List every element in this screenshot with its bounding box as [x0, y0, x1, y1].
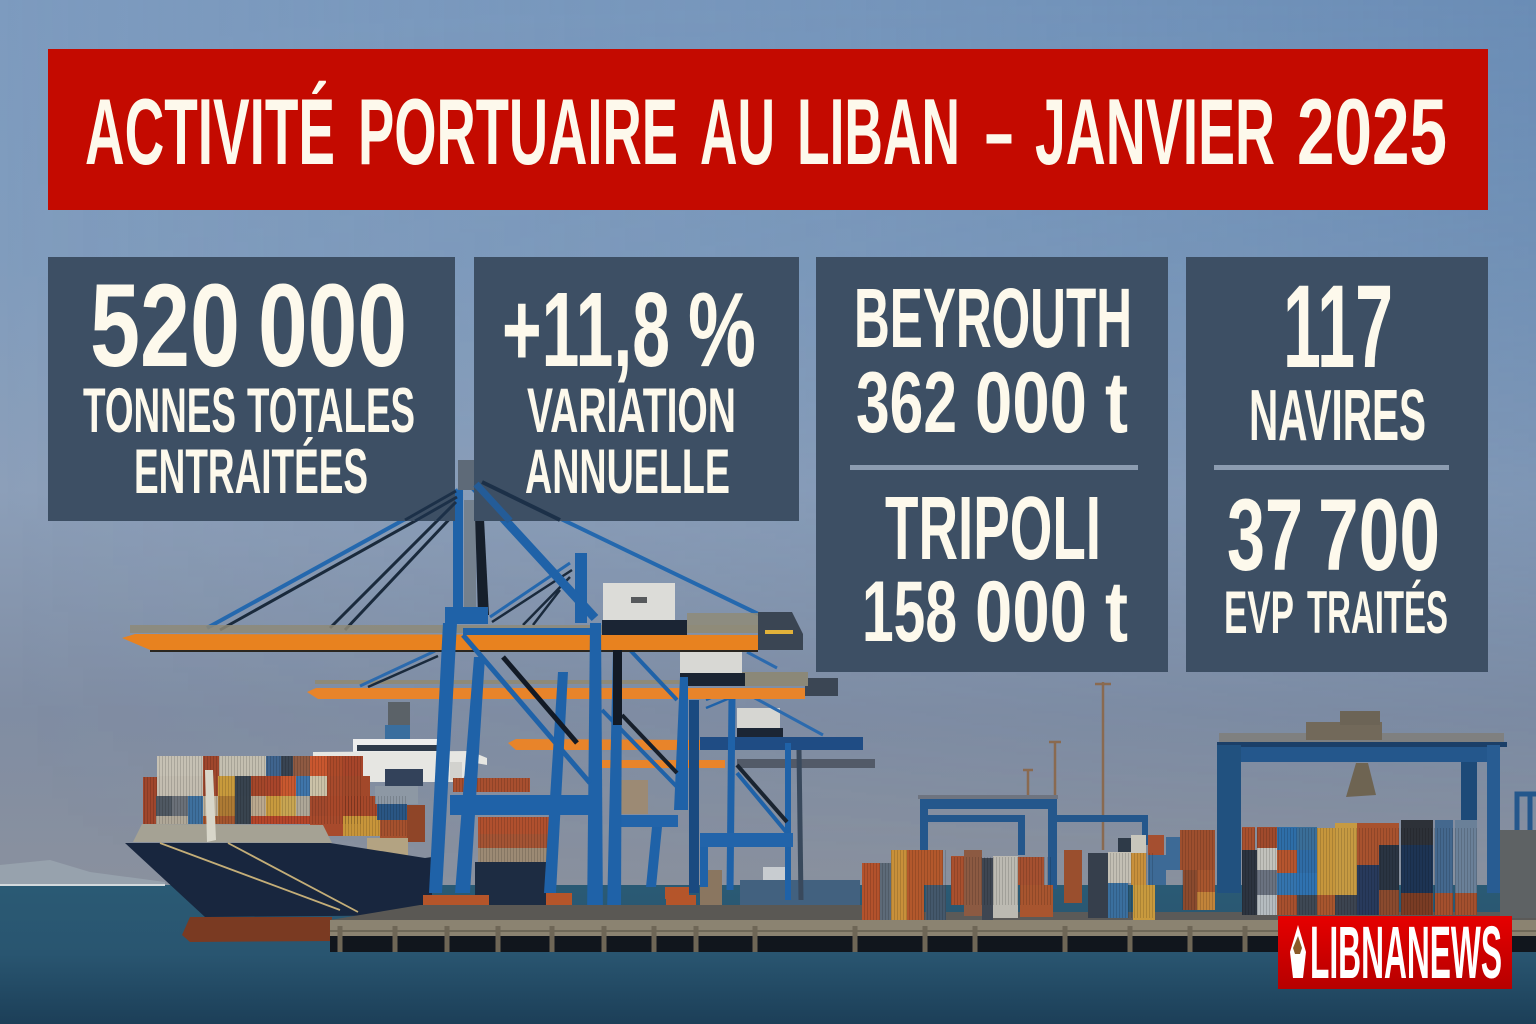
- annual variation number: %: [688, 271, 756, 389]
- total tonnage label: TONNES: [83, 376, 236, 446]
- panel: total tonnage: [48, 257, 455, 521]
- total tonnage label: [83, 376, 415, 507]
- crane cabin: [602, 583, 687, 635]
- Beyrouth figure: 000: [975, 355, 1087, 451]
- third crane: [508, 690, 863, 900]
- logo: Libnanews: [1278, 911, 1512, 994]
- crane bogies: [423, 893, 569, 915]
- Tripoli figure: [862, 479, 1128, 660]
- title text: –: [985, 79, 1013, 184]
- title text: ACTIVITÉ: [85, 79, 335, 184]
- ship hull: [125, 843, 552, 917]
- crane boom: [122, 612, 803, 652]
- icon: pen nib: [1290, 925, 1306, 978]
- mooring ropes: [160, 843, 358, 912]
- ship red keel: [182, 917, 332, 942]
- TEU figure: 700: [1318, 478, 1440, 592]
- quay deck: [330, 905, 870, 920]
- ship superstructure: [313, 702, 487, 782]
- Beyrouth figure: 362: [856, 355, 957, 451]
- annual variation label: ANNUELLE: [525, 437, 730, 507]
- panel: ships and TEU: [1186, 257, 1488, 672]
- ship containers: [143, 756, 550, 863]
- ships figure: 117: [1283, 261, 1393, 393]
- second crane: [307, 553, 838, 893]
- quay: [330, 905, 1536, 952]
- title text: 2025: [1297, 79, 1447, 184]
- ship deck: [133, 824, 332, 843]
- yard lamp posts: [1023, 682, 1111, 850]
- Beyrouth figure: t: [1105, 355, 1128, 451]
- TEU figure: [1224, 478, 1448, 646]
- panel: annual variation: [474, 257, 799, 521]
- total tonnage label: ENTRAITÉES: [134, 437, 368, 507]
- container ship: [125, 702, 552, 942]
- rear quay cranes: [307, 553, 875, 909]
- total tonnage label: TOTALES: [247, 376, 415, 446]
- ships figure: [1249, 261, 1426, 456]
- Tripoli figure: t: [1105, 564, 1128, 660]
- small gantry: [918, 795, 1148, 889]
- total tonnage number: 000: [258, 260, 407, 392]
- Beyrouth figure: [854, 271, 1132, 451]
- annual variation label: [525, 376, 736, 507]
- fourth crane boom: [602, 759, 875, 768]
- total tonnage number: 520: [90, 260, 240, 392]
- annual variation label: VARIATION: [527, 376, 736, 446]
- TEU figure: 37: [1227, 478, 1303, 592]
- total tonnage number: [90, 260, 407, 392]
- far right gantry: [1517, 794, 1536, 830]
- title text: LIBAN: [797, 79, 960, 184]
- yard gantry cranes: [918, 711, 1536, 893]
- crane stays: [207, 478, 775, 630]
- crane tops seen through panels: [405, 482, 560, 521]
- background: sea: [0, 884, 1536, 1024]
- TEU figure: EVP: [1224, 579, 1294, 646]
- Tripoli figure: 158: [862, 564, 957, 660]
- large gantry: [1217, 711, 1507, 893]
- title banner: [48, 49, 1488, 210]
- background port buildings: [620, 780, 860, 906]
- Tripoli figure: TRIPOLI: [885, 479, 1101, 579]
- title text: AU: [700, 79, 775, 184]
- Tripoli figure: 000: [975, 564, 1087, 660]
- quay piles: [340, 926, 1245, 952]
- title text: JANVIER: [1035, 79, 1275, 184]
- title text: PORTUAIRE: [358, 79, 678, 184]
- quay wall: [330, 920, 1536, 936]
- Beyrouth figure: BEYROUTH: [854, 271, 1132, 365]
- quay shadow: [330, 936, 1536, 952]
- second and third crane bogies: [546, 887, 696, 909]
- panel: ports: [816, 257, 1168, 672]
- crane legs: [429, 623, 622, 920]
- annual variation number: +11,8: [502, 271, 670, 389]
- title text: [85, 79, 1447, 184]
- main quay crane: [122, 460, 803, 920]
- crane mast: [445, 460, 489, 624]
- yard containers: [862, 820, 1536, 920]
